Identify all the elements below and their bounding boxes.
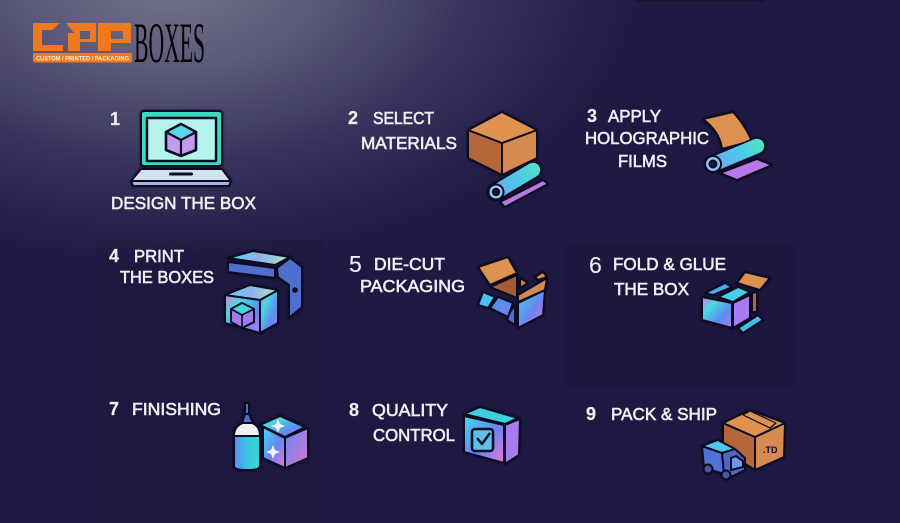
step 5 heading [349,251,465,296]
step 4 heading [109,246,214,287]
step 7 heading: 7 [109,399,119,419]
step 3 heading: 3 [587,106,597,126]
step 6 heading: 6 [589,252,602,278]
icon: shipping box and truck [702,410,785,480]
icon: laptop with cube [131,111,231,186]
step 4: print the boxes [109,246,302,333]
step 2: select materials [348,108,548,207]
step 9 heading: PACK & SHIP [611,404,717,424]
step 6: fold and glue the box [589,252,770,333]
step 3 heading: FILMS [618,151,667,171]
step 5 heading: PACKAGING [360,276,465,296]
step 2 heading [348,108,457,153]
step 8 heading: CONTROL [373,425,455,445]
step 2 heading: MATERIALS [361,133,457,153]
logo: CPP Boxes: CUSTOM / PRINTED / PACKAGING [36,56,129,62]
step 7 heading: FINISHING [132,399,221,419]
step 2 heading: 2 [348,108,358,128]
step 3 heading: APPLY [608,106,661,126]
icon: die-cut open box [478,257,547,328]
icon: printer and printed box [225,251,302,333]
step 3 heading [585,106,709,171]
step 1 number: 1 [110,109,120,129]
icon: shipping box and truck: .TD [763,445,778,455]
icon: glue bottle and finished box [234,403,308,470]
icon: box with check mark [464,407,520,464]
step 8 heading: QUALITY [372,400,448,420]
step 5: die-cut packaging [349,251,547,328]
icon: box and material roll [468,112,548,207]
step 3 heading: HOLOGRAPHIC [585,128,709,148]
step 6 heading [589,252,726,299]
text: BOXES [134,12,205,75]
step 4 heading: PRINT [134,246,184,266]
icon: holographic film roll [703,112,772,180]
step 9: pack and ship [586,404,785,480]
step 1: design the box [110,109,256,213]
logo: CPP Boxes [33,12,205,75]
step 8: quality control [349,400,520,464]
step 4 heading: 4 [109,246,119,266]
step 6 heading: THE BOX [614,279,689,299]
step 4 heading: THE BOXES [120,267,214,287]
step 8 heading: 8 [349,400,359,420]
step 9 heading: 9 [586,404,596,424]
step 5 heading: 5 [349,251,362,277]
step 2 heading: SELECT [373,108,434,128]
step 1 label: DESIGN THE BOX [111,193,256,213]
step 6 heading: FOLD & GLUE [613,254,726,274]
step 7: finishing [109,399,308,470]
step 8 heading [349,400,455,445]
step 5 heading: DIE-CUT [374,254,445,274]
step 3: apply holographic films [585,106,772,180]
icon: folded box [702,272,770,333]
